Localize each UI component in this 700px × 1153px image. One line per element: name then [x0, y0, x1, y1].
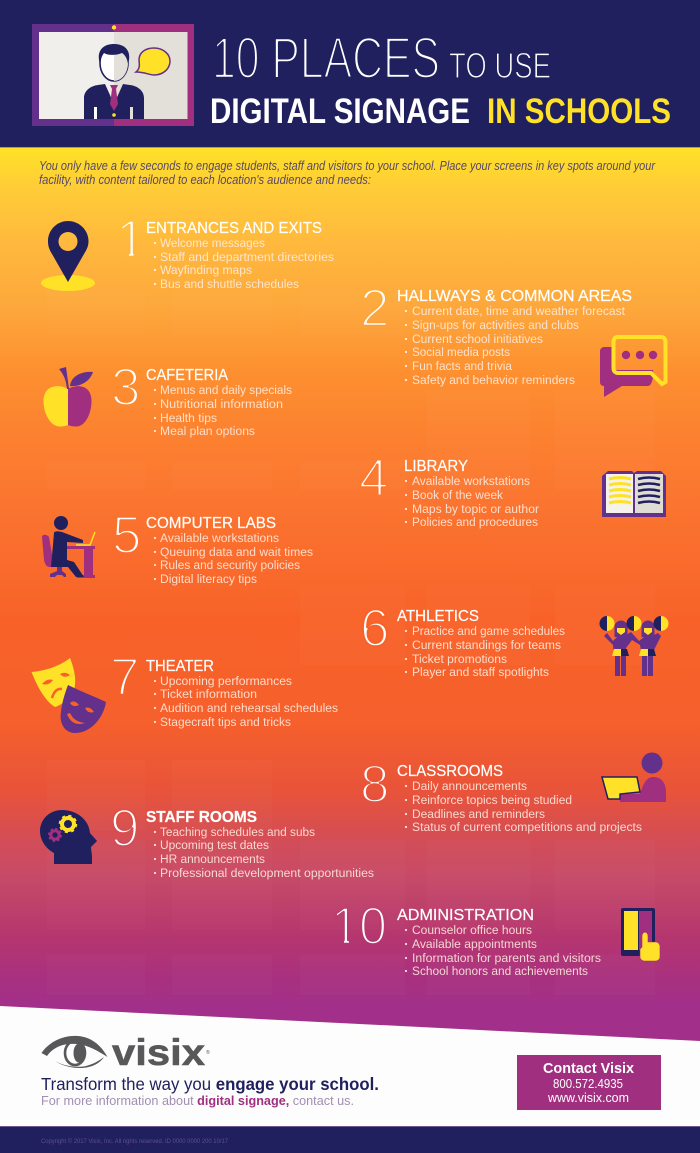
list: Current school initiatives: [412, 332, 543, 346]
list: [154, 674, 338, 729]
list: Nutritional information: [160, 397, 283, 411]
intro text: [39, 159, 656, 187]
panel: 8 classrooms: [360, 752, 666, 834]
number 2: 2: [360, 279, 389, 338]
list: Ticket information: [160, 687, 257, 701]
icon: tablet with pointing hand: [621, 908, 660, 961]
list: Player and staff spotlights: [412, 665, 549, 679]
title: [210, 26, 671, 131]
list: Health tips: [160, 411, 217, 425]
list: Safety and behavior reminders: [412, 373, 575, 387]
list: Upcoming test dates: [160, 838, 269, 852]
heading: HALLWAYS & COMMON AREAS: [397, 288, 632, 305]
list: Upcoming performances: [160, 674, 292, 688]
list: Information for parents and visitors: [412, 951, 601, 965]
list: Practice and game schedules: [412, 624, 565, 638]
list: [405, 474, 539, 529]
heading: LIBRARY: [404, 458, 468, 475]
list: Maps by topic or author: [412, 502, 539, 516]
panel: 9 staff rooms: [40, 799, 374, 880]
number 7: 7: [110, 648, 139, 707]
number 10: 10: [331, 897, 387, 956]
icon: person at computer: [42, 516, 95, 578]
number 3: 3: [111, 358, 140, 417]
bottom bar: [0, 1126, 700, 1153]
heading: STAFF ROOMS: [146, 809, 257, 826]
list: Policies and procedures: [412, 515, 538, 529]
intro text: facility, with content tailored to each location's audience and needs:: [39, 173, 371, 187]
list: [405, 304, 626, 387]
list: Daily announcements: [412, 779, 527, 793]
list: [405, 624, 565, 679]
number 9: 9: [110, 799, 139, 858]
heading: CLASSROOMS: [397, 763, 503, 780]
heading: ADMINISTRATION: [397, 907, 534, 924]
header band: [0, 0, 700, 148]
panel: 7 theater: [32, 648, 338, 733]
list: School honors and achievements: [412, 964, 588, 978]
list: [154, 236, 334, 291]
list: [405, 779, 642, 834]
icon: person with laptop: [602, 752, 666, 802]
list: Current standings for teams: [412, 638, 561, 652]
number 6: 6: [360, 599, 389, 658]
icon: chat bubbles: [600, 337, 666, 397]
list: [154, 531, 313, 586]
icon: head with gears: [40, 810, 97, 864]
list: Available workstations: [160, 531, 279, 545]
list: Book of the week: [412, 488, 504, 502]
list: [154, 825, 374, 880]
footer panel: [0, 1006, 700, 1126]
number 4: 4: [359, 449, 388, 508]
call to action: For more information about digital signage, contact us.: [41, 1093, 354, 1108]
tagline: Transform the way you engage your school.: [41, 1074, 379, 1094]
list: Bus and shuttle schedules: [160, 277, 299, 291]
list: Teaching schedules and subs: [160, 825, 315, 839]
list: [405, 923, 601, 978]
list: Counselor office hours: [412, 923, 532, 937]
list: Professional development opportunities: [160, 866, 374, 880]
icon: theater masks: [32, 658, 106, 733]
contact box: [517, 1055, 661, 1110]
icon: apple: [43, 367, 93, 427]
icon: open book: [602, 471, 666, 517]
panel: 10 administration: [331, 897, 660, 978]
list: Rules and security policies: [160, 558, 300, 572]
list: Available workstations: [412, 474, 530, 488]
list: HR announcements: [160, 852, 265, 866]
title: 10 PLACES: [212, 26, 440, 91]
list: Fun facts and trivia: [412, 359, 512, 373]
list: Current date, time and weather forecast: [412, 304, 626, 318]
panel: 4 library: [359, 449, 666, 529]
heading: ENTRANCES AND EXITS: [146, 220, 322, 237]
icon: digital sign with presenter: [32, 24, 194, 126]
title: TO USE: [449, 45, 551, 86]
list: Sign-ups for activities and clubs: [412, 318, 579, 332]
list: Social media posts: [412, 345, 510, 359]
list: Welcome messages: [160, 236, 265, 250]
visix logo: visix: [112, 1032, 205, 1073]
heading: COMPUTER LABS: [146, 515, 276, 532]
contact box: Contact Visix: [543, 1060, 635, 1077]
title: DIGITAL SIGNAGE: [210, 92, 470, 131]
list: Audition and rehearsal schedules: [160, 701, 338, 715]
number 5: 5: [112, 506, 141, 565]
icon: cheerleaders: [600, 616, 669, 676]
number 1: 1: [116, 210, 145, 269]
number 8: 8: [360, 755, 389, 814]
icon: map pin: [41, 221, 95, 291]
heading: CAFETERIA: [146, 367, 229, 384]
contact box: 800.572.4935: [553, 1077, 623, 1091]
list: Stagecraft tips and tricks: [160, 715, 291, 729]
list: Reinforce topics being studied: [412, 793, 572, 807]
list: Ticket promotions: [412, 652, 507, 666]
list: Queuing data and wait times: [160, 545, 313, 559]
list: Meal plan options: [160, 424, 255, 438]
contact box: www.visix.com: [547, 1091, 629, 1105]
list: Deadlines and reminders: [412, 807, 545, 821]
heading: ATHLETICS: [397, 608, 479, 625]
panel: 3 cafeteria: [43, 358, 292, 438]
panel: 6 athletics: [360, 599, 669, 679]
list: Menus and daily specials: [160, 383, 292, 397]
gradient background: [0, 148, 700, 1048]
panel: 2 hallways and common areas: [360, 279, 666, 397]
panel: 5 computer labs: [42, 506, 313, 586]
title: IN SCHOOLS: [487, 92, 671, 131]
panel: 1 entrances and exits: [41, 210, 334, 291]
copyright: Copyright © 2017 Visix, Inc. All rights reserved. ID 0000 0000 200 10/17: [41, 1138, 229, 1145]
list: Available appointments: [412, 937, 537, 951]
list: Wayfinding maps: [160, 263, 252, 277]
visix logo: ®: [206, 1049, 210, 1056]
visix logo: [42, 1032, 210, 1073]
list: Staff and department directories: [160, 250, 334, 264]
list: Digital literacy tips: [160, 572, 257, 586]
list: Status of current competitions and projects: [412, 820, 642, 834]
list: [154, 383, 292, 438]
heading: THEATER: [146, 658, 214, 675]
